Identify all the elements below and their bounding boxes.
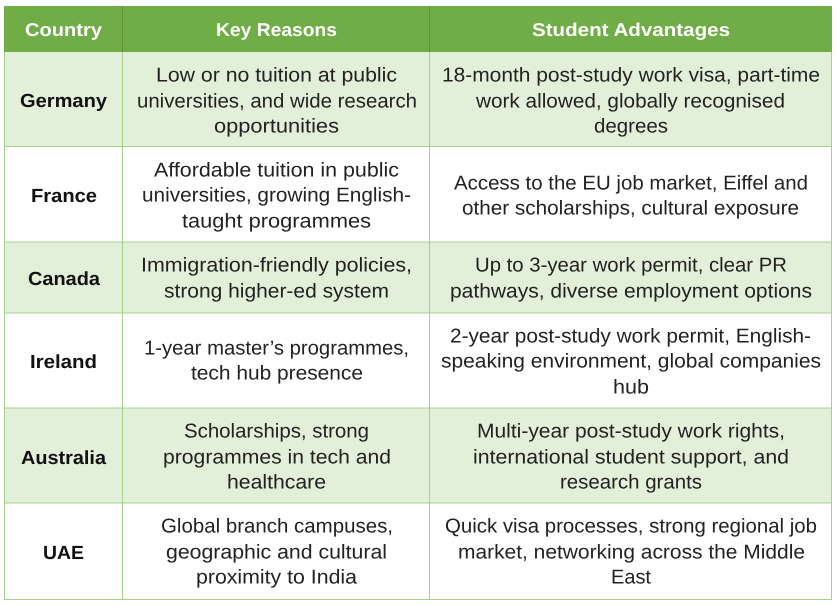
reasons: Australia: Scholarships, strong xyxy=(184,421,369,443)
reasons: Canada: strong higher-ed system xyxy=(164,281,389,303)
advantages: UAE xyxy=(445,516,817,589)
advantages: UAE: market, networking across the Middle xyxy=(458,542,805,564)
row: UAE xyxy=(4,503,832,599)
row: France xyxy=(4,147,832,242)
reasons: Germany: opportunities xyxy=(214,116,339,138)
advantages: Australia xyxy=(473,421,789,494)
reasons: France: Affordable tuition in public xyxy=(154,160,399,182)
advantages: France xyxy=(454,173,808,220)
advantages: UAE: Quick visa processes, strong regional job xyxy=(445,516,817,538)
advantages: Germany: degrees xyxy=(594,116,668,138)
row: Canada xyxy=(4,242,832,313)
reasons: Ireland xyxy=(144,338,409,385)
advantages: Germany: work allowed, globally recognised xyxy=(475,91,785,113)
header: Country: Country xyxy=(25,19,103,40)
reasons: UAE: geographic and cultural xyxy=(166,542,387,564)
advantages: Canada xyxy=(450,255,812,303)
header: Key Reasons: Key Reasons xyxy=(216,19,337,40)
reasons: UAE xyxy=(161,516,393,589)
country: Australia: Australia xyxy=(21,448,106,469)
reasons: Germany: universities, and wide research xyxy=(137,91,417,113)
advantages: Australia: Multi-year post-study work rights, xyxy=(477,421,785,443)
reasons: Australia xyxy=(163,421,391,494)
advantages: UAE: East xyxy=(611,567,651,589)
reasons: Germany: Low or no tuition at public xyxy=(156,65,397,87)
advantages: Australia: international student support, and xyxy=(473,447,789,469)
row: Ireland xyxy=(4,313,832,408)
reasons: Ireland: 1-year master’s programmes, xyxy=(144,338,409,360)
country: Germany: Germany xyxy=(20,91,107,112)
advantages: Ireland: speaking environment, global companies xyxy=(441,351,821,373)
country: Ireland: Ireland xyxy=(30,352,97,373)
advantages: France: other scholarships, cultural exposure xyxy=(462,198,799,220)
advantages: Ireland: hub xyxy=(613,377,649,399)
row: Australia xyxy=(4,408,832,503)
advantages: Canada: pathways, diverse employment options xyxy=(450,281,812,303)
reasons: Canada xyxy=(141,255,412,303)
reasons: France: universities, growing English- xyxy=(142,185,411,207)
reasons: Ireland: tech hub presence xyxy=(191,363,363,385)
country: Canada: Canada xyxy=(28,269,100,290)
reasons: Australia: healthcare xyxy=(227,472,326,494)
reasons: Germany xyxy=(137,65,417,138)
advantages: Germany: 18-month post-study work visa, part-time xyxy=(442,65,820,87)
advantages: Germany xyxy=(442,65,820,138)
row: Germany xyxy=(4,52,832,147)
reasons: France xyxy=(142,160,411,233)
advantages: Ireland xyxy=(441,326,821,399)
reasons: UAE: proximity to India xyxy=(196,567,358,589)
country: France: France xyxy=(31,186,97,207)
advantages: Australia: research grants xyxy=(560,472,702,494)
reasons: Australia: programmes in tech and xyxy=(163,447,391,469)
advantages: Canada: Up to 3-year work permit, clear PR xyxy=(475,255,787,277)
country: UAE: UAE xyxy=(43,543,84,564)
reasons: UAE: Global branch campuses, xyxy=(161,516,393,538)
header row xyxy=(4,6,832,52)
advantages: France: Access to the EU job market, Eiffel and xyxy=(454,173,808,195)
reasons: France: taught programmes xyxy=(182,211,371,233)
advantages: Ireland: 2-year post-study work permit, English- xyxy=(450,326,811,348)
header: Student Advantages: Student Advantages xyxy=(532,19,730,40)
reasons: Canada: Immigration-friendly policies, xyxy=(141,255,412,277)
